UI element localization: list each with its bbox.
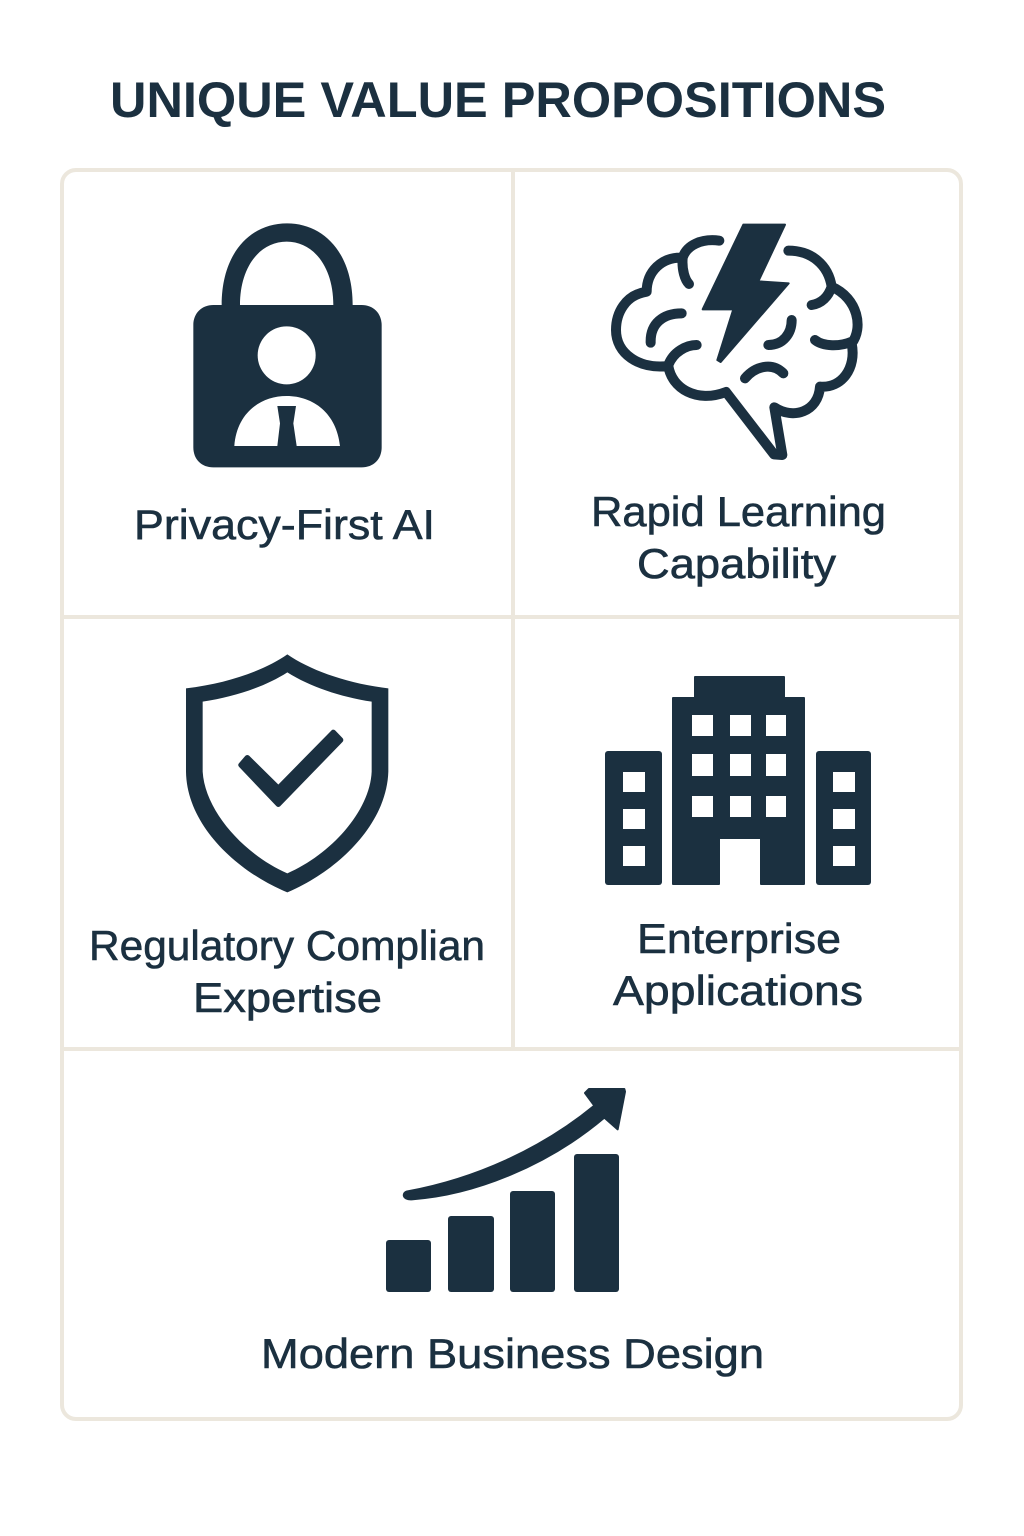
label: Enterprise Applications: Enterprise xyxy=(637,915,841,962)
icon: rising bar chart with arrow xyxy=(386,1089,625,1292)
label: Regulatory Complian Expertise: Expertise xyxy=(193,974,382,1021)
panel: rapid learning capability xyxy=(591,225,886,587)
icon: padlock with person xyxy=(193,223,382,467)
panel: regulatory compliance expertise xyxy=(89,654,485,1021)
icon: brain with lightning bolt xyxy=(616,225,858,455)
title: UNIQUE VALUE PROPOSITIONS xyxy=(110,72,886,128)
panel: enterprise applications xyxy=(605,677,871,1014)
label: Enterprise Applications xyxy=(613,915,863,1014)
panel grid frame xyxy=(62,170,961,1419)
label: Rapid Learning Capability: Rapid Learning xyxy=(591,488,886,535)
icon: office buildings xyxy=(605,677,871,885)
panel: privacy-first AI xyxy=(134,223,435,548)
label: Modern Business Design: Modern Business Design xyxy=(261,1330,764,1377)
label: Rapid Learning Capability xyxy=(591,488,886,587)
label: Rapid Learning Capability: Capability xyxy=(637,540,836,587)
label: Privacy-First AI: Privacy-First AI xyxy=(134,501,435,548)
panel: modern business design xyxy=(261,1089,764,1377)
label: Regulatory Complian Expertise xyxy=(89,922,485,1021)
label: Enterprise Applications: Applications xyxy=(613,967,863,1014)
label: Regulatory Complian Expertise: Regulatory Complian xyxy=(89,922,485,969)
icon: shield with checkmark xyxy=(186,654,388,892)
